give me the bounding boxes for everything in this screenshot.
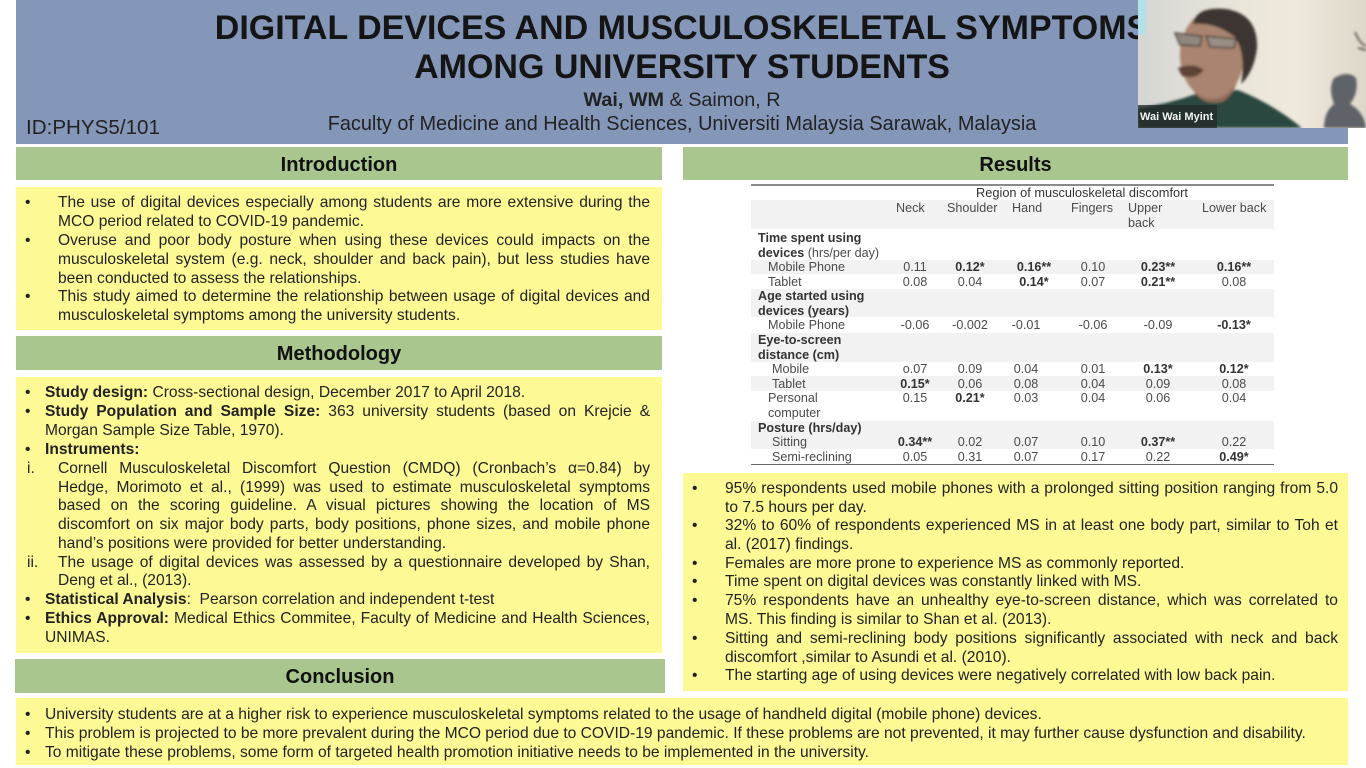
panel: methodology text: ii. <box>27 554 38 571</box>
panel: methodology text: based on the scoring guideline. A visual pictures showing the location of MS <box>58 497 650 514</box>
row group: eye-to-screen distance: 0.06 <box>1146 391 1170 405</box>
row group: time spent: Mobile Phone <box>768 260 845 274</box>
column headers: Lower back <box>1202 201 1266 215</box>
row group: eye-to-screen distance: distance (cm) <box>758 348 839 362</box>
heading: results <box>683 147 1348 180</box>
title: DIGITAL DEVICES AND MUSCULOSKELETAL SYMPTOMS <box>215 9 1149 47</box>
correlation table <box>751 184 1274 466</box>
row group: posture: 0.22 <box>1222 435 1246 449</box>
row group: eye-to-screen distance: 0.13* <box>1143 362 1173 376</box>
row group: eye-to-screen distance: 0.09 <box>1146 377 1170 391</box>
row group: eye-to-screen distance: 0.12* <box>1219 362 1249 376</box>
row group: posture: 0.49* <box>1219 450 1249 464</box>
panel: results findings: • <box>692 517 697 534</box>
row group: eye-to-screen distance: o.07 <box>903 362 927 376</box>
row group: posture: 0.34** <box>898 435 932 449</box>
panel: methodology text: • <box>25 403 30 420</box>
row group: eye-to-screen distance: 0.15* <box>900 377 930 391</box>
row group: posture: 0.07 <box>1014 450 1038 464</box>
row group: eye-to-screen distance: 0.06 <box>958 377 982 391</box>
row group: posture: 0.37** <box>1141 435 1175 449</box>
row group: eye-to-screen distance: 0.04 <box>1081 377 1105 391</box>
row group: age started: -0.06 <box>1079 318 1107 332</box>
row group: time spent: Tablet <box>768 275 802 289</box>
row group: time spent: 0.21** <box>1141 275 1175 289</box>
header banner <box>16 0 1348 144</box>
row group: time spent: 0.16** <box>1017 260 1051 274</box>
panel: methodology text: • <box>25 384 30 401</box>
row group: age started: -0.06 <box>901 318 929 332</box>
row group: eye-to-screen distance: Eye-to-screen <box>758 333 841 347</box>
panel: results findings: The starting age of using devices were negatively correlated with low back pain. <box>725 667 1275 684</box>
panel: conclusion text: • <box>25 706 30 723</box>
panel: results findings: al. (2017) findings. <box>725 536 853 553</box>
column headers: Neck <box>896 201 925 215</box>
panel: methodology text: i. <box>27 460 35 477</box>
participant name: Wai Wai Myint <box>1140 111 1213 123</box>
row group: time spent: 0.07 <box>1081 275 1105 289</box>
panel: conclusion text: • <box>25 725 30 742</box>
panel: results findings: Sitting and semi-reclining body positions significantly associated with neck and back <box>725 630 1338 647</box>
row group: posture: 0.05 <box>903 450 927 464</box>
panel: methodology text: Study Population and Sample Size: 363 university students (based on Krejcie & <box>45 403 650 420</box>
row group: posture: Semi-reclining <box>772 450 852 464</box>
row group: eye-to-screen distance: computer <box>768 406 820 420</box>
panel: introduction text <box>16 187 662 330</box>
heading: results: Results <box>979 154 1052 176</box>
row group: eye-to-screen distance: 0.21* <box>955 391 985 405</box>
panel: introduction text: • <box>25 288 30 305</box>
panel: results findings: Time spent on digital devices was constantly linked with MS. <box>725 573 1141 590</box>
panel: results findings: • <box>692 573 697 590</box>
row group: time spent: 0.23** <box>1141 260 1175 274</box>
title: AMONG UNIVERSITY STUDENTS <box>414 48 950 86</box>
column headers: back <box>1128 216 1155 230</box>
row group: eye-to-screen distance: 0.03 <box>1014 391 1038 405</box>
row group: age started: -0.01 <box>1012 318 1040 332</box>
webcam video overlay <box>1138 0 1366 128</box>
row group: posture: 0.22 <box>1146 450 1170 464</box>
panel: results findings: MS. This finding is similar to Shan et al. (2013). <box>725 611 1051 628</box>
panel: introduction text: been conducted to assess the relationships. <box>58 270 361 287</box>
row group: age started: Mobile Phone <box>768 318 845 332</box>
row group: time spent: 0.11 <box>903 260 927 274</box>
panel: results findings: • <box>692 667 697 684</box>
column headers: Fingers <box>1071 201 1113 215</box>
row group: time spent: 0.10 <box>1081 260 1105 274</box>
row group: eye-to-screen distance: 0.09 <box>958 362 982 376</box>
row group: time spent: Time spent using <box>758 231 861 245</box>
panel: results findings: 32% to 60% of respondents experienced MS in at least one body part, similar to Toh et <box>725 517 1338 534</box>
panel: introduction text: The use of digital devices especially among students are more extensive during the <box>58 194 650 211</box>
heading: methodology: Methodology <box>277 343 401 365</box>
row group: posture: 0.31 <box>958 450 982 464</box>
row group: eye-to-screen distance: 0.15 <box>903 391 927 405</box>
row group: eye-to-screen distance: Personal <box>768 391 818 405</box>
panel: methodology text: The usage of digital devices was assessed by a questionnaire developed by Shan, <box>58 554 650 571</box>
heading: conclusion <box>15 659 665 693</box>
panel: results findings: • <box>692 555 697 572</box>
row group: time spent <box>758 231 1252 289</box>
table super-header: Region of musculoskeletal discomfort <box>976 185 1188 200</box>
affiliation: Faculty of Medicine and Health Sciences, Universiti Malaysia Sarawak, Malaysia <box>328 113 1036 135</box>
panel: conclusion text: University students are at a higher risk to experience musculoskeletal symptoms related to the usage of handheld digital (mobile phone) devices. <box>45 706 1042 723</box>
row group: posture <box>758 421 1249 464</box>
panel: methodology text: Study design: Cross-sectional design, December 2017 to April 2018. <box>45 384 525 401</box>
panel: methodology text: • <box>25 591 30 608</box>
panel: results findings <box>683 473 1348 691</box>
column headers <box>896 201 1266 230</box>
row group: age started <box>758 289 1251 332</box>
row group: time spent: devices (hrs/per day) <box>758 246 879 260</box>
row group: eye-to-screen distance: 0.01 <box>1081 362 1105 376</box>
row group: time spent: 0.08 <box>1222 275 1246 289</box>
panel: introduction text: MCO period related to COVID-19 pandemic. <box>58 213 364 230</box>
row group: age started: Age started using <box>758 289 864 303</box>
panel: conclusion text: This problem is projected to be more prevalent during the MCO period due to COVID-19 pandemic. If these problems are not prevented, it may further cause dysfunction and disability. <box>45 725 1306 742</box>
row group: eye-to-screen distance: 0.04 <box>1222 391 1246 405</box>
column headers: Hand <box>1012 201 1042 215</box>
row group: time spent: 0.12* <box>955 260 985 274</box>
panel: methodology text: • <box>25 441 30 458</box>
heading: methodology <box>16 336 662 370</box>
panel: results findings: 75% respondents have an unhealthy eye-to-screen distance, which was correlated to <box>725 592 1338 609</box>
column headers: Shoulder <box>947 201 997 215</box>
panel: introduction text: • <box>25 194 30 211</box>
panel: results findings: Females are more prone to experience MS as commonly reported. <box>725 555 1184 572</box>
row group: age started: devices (years) <box>758 304 849 318</box>
panel: methodology text: • <box>25 610 30 627</box>
panel: results findings: 95% respondents used mobile phones with a prolonged sitting position ranging from 5.0 <box>725 480 1338 497</box>
panel: methodology text: Statistical Analysis: Pearson correlation and independent t-test <box>45 591 494 608</box>
row group: eye-to-screen distance: Tablet <box>772 377 806 391</box>
panel: results findings: • <box>692 592 697 609</box>
row group: time spent: 0.08 <box>903 275 927 289</box>
authors: Wai, WM & Saimon, R <box>583 89 781 111</box>
panel: methodology text: Cornell Musculoskeletal Discomfort Question (CMDQ) (Cronbach’s α=0.84) by <box>58 460 650 477</box>
panel: methodology text <box>16 377 662 653</box>
column headers: Upper <box>1128 201 1162 215</box>
row group: age started: -0.13* <box>1217 318 1251 332</box>
row group: eye-to-screen distance <box>758 333 1249 420</box>
panel: results findings: • <box>692 630 697 647</box>
row group: time spent: 0.14* <box>1019 275 1049 289</box>
panel: methodology text: Deng et al., (2013). <box>58 572 192 589</box>
panel: introduction text: musculoskeletal system (e.g. neck, shoulder and back pain), but less studies have <box>58 251 650 268</box>
panel: conclusion text: To mitigate these problems, some form of targeted health promotion initiative needs to be implemented in the university. <box>45 744 869 761</box>
row group: posture: Sitting <box>772 435 807 449</box>
panel: introduction text: Overuse and poor body posture when using these devices could impacts on the <box>58 232 650 249</box>
panel: methodology text: UNIMAS. <box>45 629 110 646</box>
row group: eye-to-screen distance: 0.08 <box>1222 377 1246 391</box>
panel: methodology text: hand’s positions were provided for better understanding. <box>58 535 446 552</box>
row group: eye-to-screen distance: 0.04 <box>1081 391 1105 405</box>
panel: conclusion text <box>16 698 1348 765</box>
panel: introduction text: This study aimed to determine the relationship between usage of digital devices and <box>58 288 650 305</box>
panel: introduction text: musculoskeletal symptoms among the university students. <box>58 307 460 324</box>
panel: conclusion text: • <box>25 744 30 761</box>
panel: methodology text: Ethics Approval: Medical Ethics Commitee, Faculty of Medicine and Health Sciences, <box>45 610 650 627</box>
row group: eye-to-screen distance: 0.08 <box>1014 377 1038 391</box>
row group: posture: 0.10 <box>1081 435 1105 449</box>
panel: results findings: • <box>692 480 697 497</box>
row group: posture: 0.17 <box>1081 450 1105 464</box>
panel: methodology text: Instruments: <box>45 441 139 458</box>
poster id: ID:PHYS5/101 <box>26 116 160 139</box>
row group: time spent: 0.04 <box>958 275 982 289</box>
row group: posture: Posture (hrs/day) <box>758 421 862 435</box>
row group: posture: 0.02 <box>958 435 982 449</box>
panel: methodology text: Morgan Sample Size Table, 1970). <box>45 422 284 439</box>
heading: introduction <box>16 147 662 180</box>
panel: results findings: discomfort ,similar to Asundi et al. (2010). <box>725 649 1011 666</box>
heading: introduction: Introduction <box>281 154 397 176</box>
row group: age started: -0.09 <box>1144 318 1172 332</box>
row group: eye-to-screen distance: Mobile <box>772 362 809 376</box>
row group: eye-to-screen distance: 0.04 <box>1014 362 1038 376</box>
row group: time spent: 0.16** <box>1217 260 1251 274</box>
panel: introduction text: • <box>25 232 30 249</box>
row group: age started: -0.002 <box>952 318 988 332</box>
panel: methodology text: discomfort on six major body parts, body positions, phone sizes, and mobile phone <box>58 516 650 533</box>
panel: methodology text: Hedge, Morimoto et al., (1999) was used to estimate musculoskeletal symptoms <box>58 479 650 496</box>
row group: posture: 0.07 <box>1014 435 1038 449</box>
heading: conclusion: Conclusion <box>286 666 394 688</box>
panel: results findings: to 7.5 hours per day. <box>725 499 867 516</box>
title <box>215 9 1149 86</box>
